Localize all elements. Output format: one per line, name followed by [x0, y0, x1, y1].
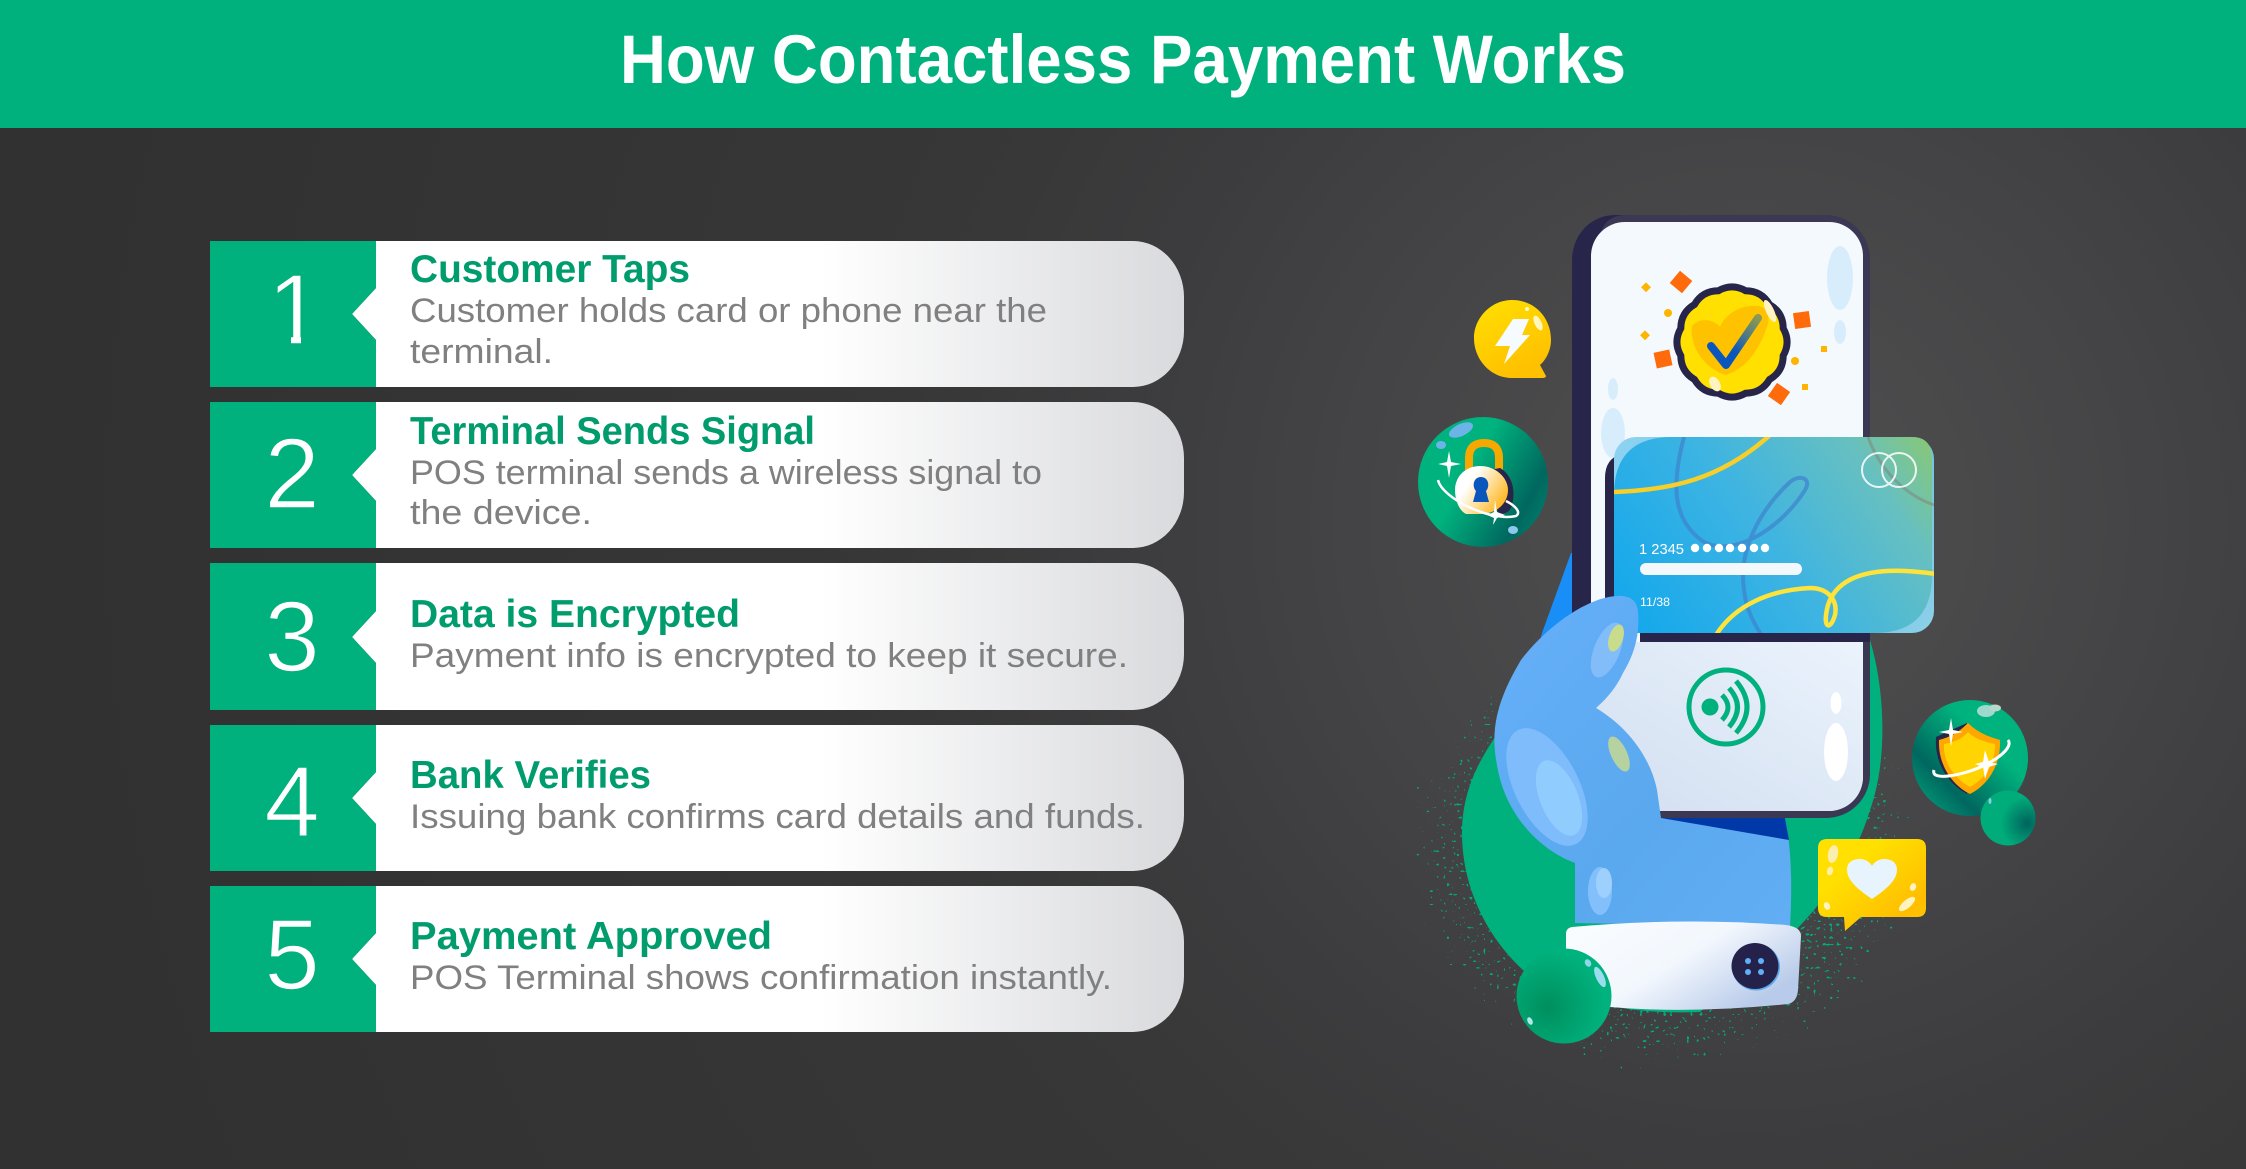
step 4 description: Issuing bank confirms card details and funds. — [410, 798, 1145, 836]
step 4 heading: Bank Verifies — [410, 754, 651, 797]
green bubble at cuff — [1516, 948, 1612, 1044]
phone — [1572, 215, 1870, 818]
number 2: 2 — [264, 418, 320, 530]
number 1: 1 — [267, 254, 323, 366]
lower screen — [1591, 642, 1863, 811]
step 2 heading: Terminal Sends Signal — [410, 410, 815, 453]
green blob — [1462, 640, 1882, 1012]
screen highlights — [1601, 246, 1853, 458]
illustration: hand holding phone and card — [1400, 215, 2036, 1080]
step 3 heading: Data is Encrypted — [410, 593, 740, 636]
header banner — [0, 0, 2246, 128]
step 2 description: POS terminal sends a wireless signal to — [410, 454, 1042, 492]
step 2 description: the device. — [410, 494, 592, 532]
number 5: 5 — [264, 899, 320, 1011]
hand — [1489, 596, 1791, 927]
card number dots — [1691, 544, 1769, 552]
heart speech bubble — [1818, 839, 1926, 931]
credit card — [1605, 435, 1936, 636]
step 2 panel — [210, 402, 1184, 548]
step 3 panel — [210, 563, 1184, 710]
card number: 1 2345 — [1639, 541, 1684, 558]
green speckles — [1400, 625, 1930, 1080]
title: How Contactless Payment Works — [620, 21, 1626, 98]
lightning speech bubble — [1474, 300, 1551, 378]
lock circle icon — [1418, 417, 1548, 547]
NFC contactless icon — [1689, 670, 1763, 744]
step 5 heading: Payment Approved — [410, 915, 772, 958]
small teal bubble — [1980, 790, 2036, 846]
step 5 description: POS Terminal shows confirmation instantly. — [410, 959, 1112, 997]
lower screen highlights — [1824, 692, 1848, 781]
sleeve cuff — [1566, 921, 1801, 1010]
under-phone shadow — [1661, 818, 1789, 840]
hand highlights — [1489, 715, 1605, 859]
step 5 panel — [210, 886, 1184, 1032]
card scribbles — [1614, 435, 1936, 636]
step 3 description: Payment info is encrypted to keep it secure. — [410, 637, 1128, 675]
confetti — [1654, 271, 1811, 405]
step 4 panel — [210, 725, 1184, 871]
number 1 base mask — [262, 335, 325, 346]
cuff button — [1732, 944, 1780, 990]
shield circle icon — [1912, 700, 2028, 816]
step 1 panel — [210, 241, 1184, 387]
card expiry: 11/38 — [1640, 595, 1670, 609]
step 1 heading: Customer Taps — [410, 248, 690, 291]
step 1 description: terminal. — [410, 333, 553, 371]
hand back shadow — [1530, 553, 1600, 680]
card name bar — [1640, 563, 1802, 575]
number 3: 3 — [264, 581, 320, 693]
number 4: 4 — [264, 746, 320, 858]
band below card — [1640, 630, 1870, 642]
phone screen — [1591, 222, 1863, 811]
card logo rings — [1862, 453, 1916, 487]
step 1 description: Customer holds card or phone near the — [410, 292, 1047, 330]
verified badge — [1640, 271, 1827, 405]
